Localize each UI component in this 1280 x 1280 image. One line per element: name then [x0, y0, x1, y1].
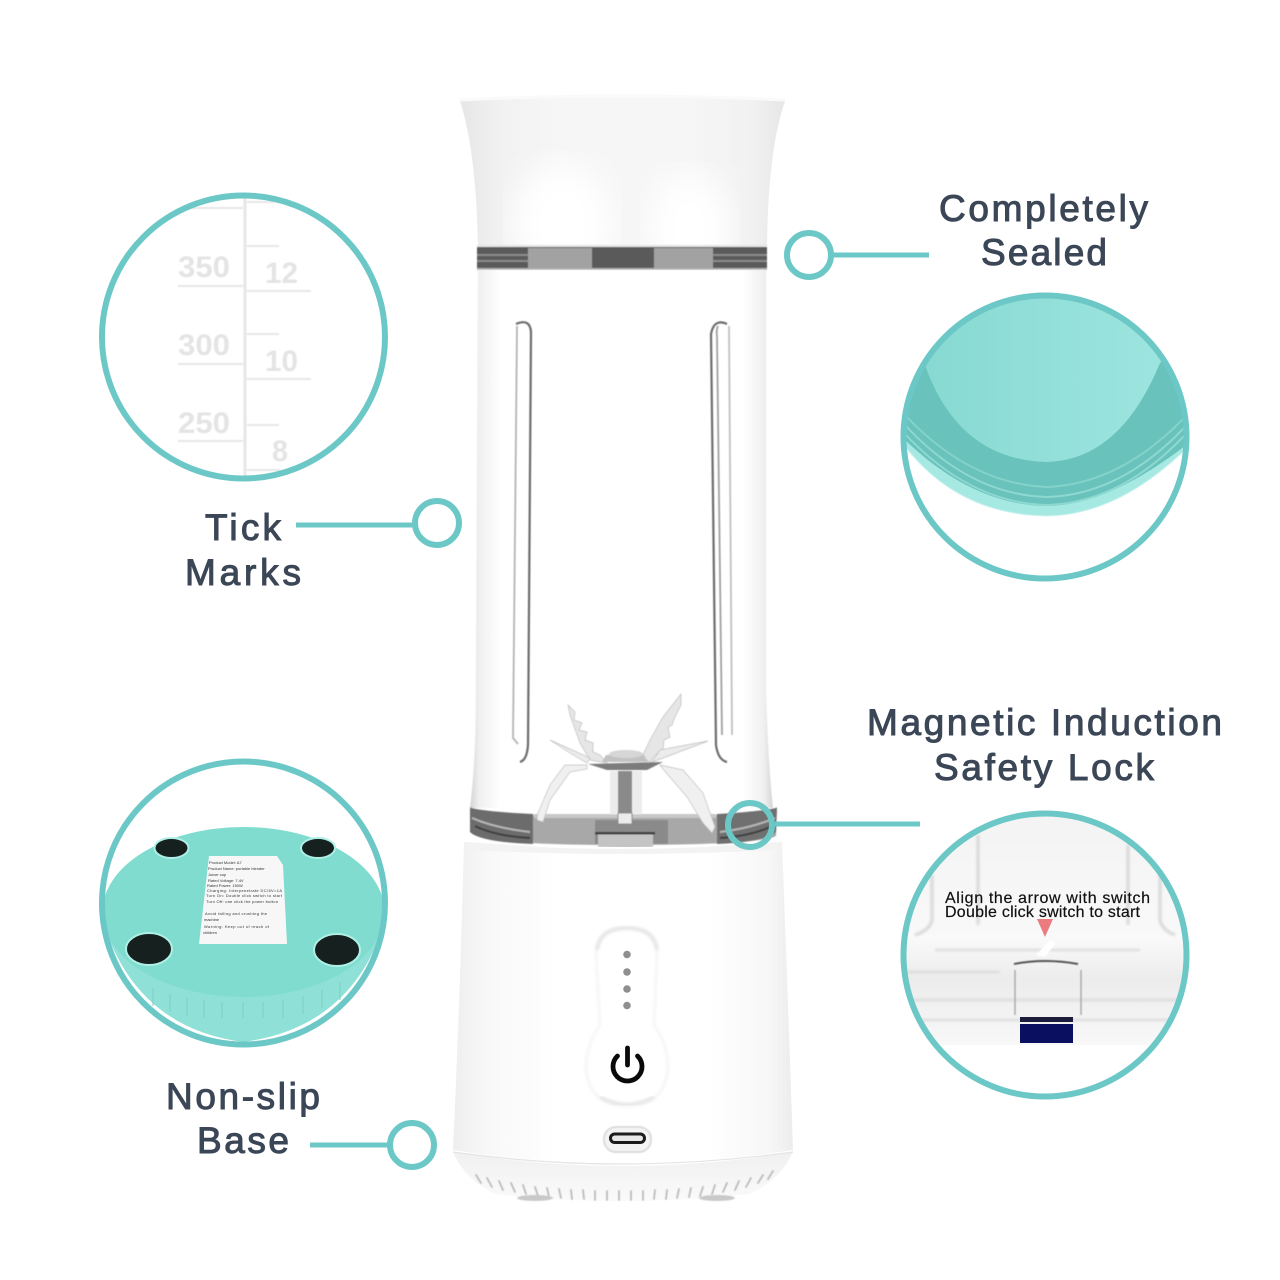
base detail circle — [102, 762, 385, 1044]
red arrow — [1037, 919, 1053, 937]
tick marks detail circle: 250 — [178, 407, 230, 440]
USB-C port — [604, 1127, 651, 1152]
sealed label — [939, 188, 1148, 273]
callout: completely sealed — [787, 188, 1190, 578]
base spec sticker: Warning: Keep out of reach of — [204, 924, 270, 929]
base spec sticker: Product Name: portable blender — [208, 866, 265, 871]
glass jar — [470, 270, 773, 808]
foot pads — [126, 838, 360, 966]
safety lock label — [867, 702, 1222, 788]
blender product image — [453, 96, 793, 1201]
tick marks detail circle — [102, 190, 385, 480]
rubber feet — [517, 1195, 735, 1201]
alignment text: Align the arrow with switch — [945, 890, 1150, 907]
safety lock label: Safety Lock — [934, 747, 1154, 788]
lens glare — [1014, 940, 1081, 1015]
seal band — [477, 245, 767, 270]
blade assembly — [537, 694, 715, 833]
lower blades — [537, 765, 715, 833]
tick marks connector — [296, 501, 459, 545]
non-slip connector — [310, 1123, 434, 1167]
bottom jar band — [470, 807, 777, 849]
shaft — [610, 771, 642, 824]
non-slip label: Base — [197, 1120, 289, 1161]
base spec sticker: machine — [204, 917, 220, 922]
motor base — [453, 842, 793, 1164]
right inner rib — [711, 322, 732, 762]
callout: non-slip base — [102, 762, 434, 1167]
callout: tick marks — [102, 190, 459, 593]
tick marks label: Tick — [205, 507, 282, 548]
control panel — [586, 928, 668, 1106]
sealed connector — [787, 233, 929, 277]
safety lock label: Magnetic Induction — [867, 702, 1222, 743]
tick marks label: Marks — [185, 552, 301, 593]
base spec sticker: Product Model: A7 — [209, 860, 242, 865]
tick marks detail circle: 10 — [265, 345, 298, 378]
base disc — [102, 827, 384, 997]
tick marks detail circle: 300 — [178, 329, 230, 362]
tick marks detail circle: 8 — [272, 435, 288, 468]
base spec sticker: Rated Power: 150W — [207, 883, 243, 888]
alignment text — [944, 891, 1150, 918]
base spec sticker: Avoid falling and crushing the — [205, 911, 268, 916]
non-slip label: Non-slip — [166, 1076, 320, 1117]
upper blades — [550, 694, 708, 763]
power button icon — [613, 1048, 642, 1081]
base spec sticker: Turn Off: one click the power button — [206, 899, 278, 904]
vented skirt — [453, 1152, 793, 1201]
base skirt — [110, 938, 378, 1042]
base spec sticker: Charging: Interpenetrate DC/5V=1A — [207, 888, 282, 893]
silicone seal detail circle — [900, 290, 1190, 578]
blender lid — [460, 98, 785, 246]
base spec sticker — [199, 856, 287, 944]
base spec sticker: children — [203, 930, 217, 935]
base spec sticker: Juicer cup — [208, 872, 227, 877]
indicator lights — [623, 951, 631, 1009]
magnet window — [1020, 1017, 1073, 1043]
blade hub — [588, 750, 663, 770]
callout: magnetic induction safety lock — [728, 702, 1222, 1105]
safety lock detail circle — [900, 810, 1190, 1105]
alignment text: Double click switch to start — [945, 904, 1141, 921]
non-slip label — [166, 1076, 320, 1161]
safety lock connector — [728, 803, 920, 847]
sealed label: Sealed — [981, 232, 1107, 273]
base spec sticker: Turn On: Double click switch to start — [206, 893, 283, 898]
tick marks label — [185, 507, 301, 593]
base spec sticker: Rated Voltage: 7.4V — [208, 878, 244, 883]
tick marks detail circle: 12 — [265, 257, 298, 290]
left inner rib — [513, 322, 531, 762]
sealed label: Completely — [939, 188, 1148, 229]
tick marks detail circle: 350 — [178, 251, 230, 284]
